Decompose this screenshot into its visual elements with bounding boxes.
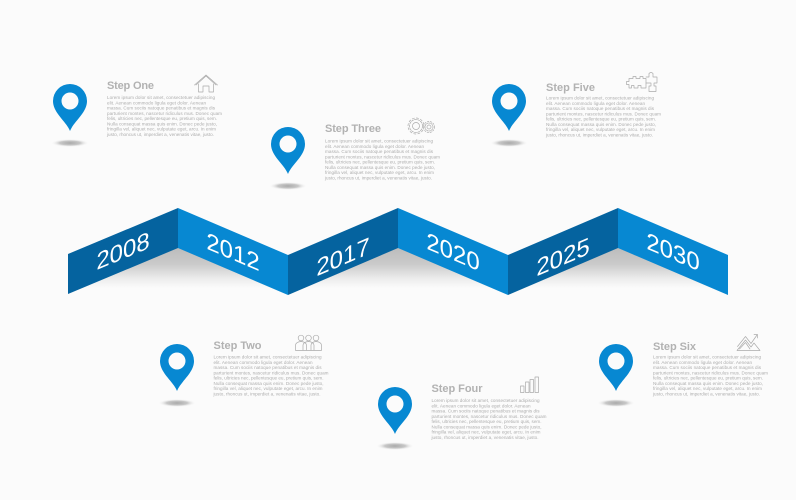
pin: step four [376, 387, 414, 450]
step three block [269, 118, 440, 190]
heading: step two: Step Two [214, 340, 262, 352]
text block: step one [106, 95, 222, 137]
text block: step two: felis, ultricies nec, pellentesque eu, pretium quis, sem. [214, 376, 324, 380]
text block: step six: Nulla consequat massa quis enim. Donec pede justo, [653, 381, 763, 386]
heading: step five: Step Five [546, 82, 595, 94]
text block: step four: justo, rhoncus ut, imperdiet a, venenatis vitae, justo. [430, 435, 538, 440]
text block: step four [430, 398, 547, 440]
pin: step five [490, 84, 528, 147]
step one block [51, 75, 222, 147]
text block: step one: Nulla consequat massa quis enim. Donec pede justo, [107, 121, 217, 126]
pin: step three [269, 127, 307, 190]
text block: step two: fringilla vel, aliquet nec, vulputate eget, arcu. In enim [214, 386, 323, 391]
text block: step one: Lorem ipsum dolor sit amet, consectetuer adipiscing [107, 95, 215, 100]
heading: step three: Step Three [325, 123, 381, 135]
text block: step four: fringilla vel, aliquet nec, vulputate eget, arcu. In enim [432, 430, 541, 434]
text block: step one: massa. Cum sociis natoque penatibus et magnis dis [107, 106, 216, 110]
text block: step three: justo, rhoncus ut, imperdiet a, venenatis vitae, justo. [324, 175, 432, 180]
text block: step two: elit. Aenean commodo ligula eget dolor. Aenean [214, 360, 313, 365]
text block: step four: Nulla consequat massa quis enim. Donec pede justo, [432, 424, 542, 429]
panel: 2008: 2008 [96, 227, 150, 276]
text block: step three: parturient montes, nascetur ridiculus mus. Donec quam [325, 154, 440, 159]
text block: step one: justo, rhoncus ut, imperdiet a, venenatis vitae, justo. [106, 132, 214, 137]
text block: step one: parturient montes, nascetur ridiculus mus. Donec quam [107, 111, 222, 116]
text block: step five: fringilla vel, aliquet nec, vulputate eget, arcu. In enim [546, 127, 655, 132]
text block: step five: elit. Aenean commodo ligula eget dolor. Aenean [546, 101, 645, 106]
panel: 2025 [508, 208, 618, 295]
pin: step two [158, 344, 196, 407]
step five block [490, 72, 661, 147]
text block: step three: massa. Cum sociis natoque penatibus et magnis dis [325, 149, 434, 154]
text block: step six: fringilla vel, aliquet nec, vulputate eget, arcu. In enim [653, 386, 762, 391]
text block: step four: parturient montes, nascetur ridiculus mus. Donec quam [432, 414, 547, 419]
text block: step three: elit. Aenean commodo ligula eget dolor. Aenean [325, 144, 424, 149]
text block: step four: Lorem ipsum dolor sit amet, consectetuer adipiscing [432, 398, 540, 403]
icon: people [296, 335, 322, 350]
text block: step four: massa. Cum sociis natoque penatibus et magnis dis [432, 408, 540, 414]
text block: step three: felis, ultricies nec, pellentesque eu, pretium quis, sem. [325, 160, 435, 164]
text block: step six: parturient montes, nascetur ridiculus mus. Donec quam [653, 370, 768, 375]
text block: step five [545, 96, 661, 137]
heading: step six: Step Six [653, 341, 697, 353]
text block: step two: justo, rhoncus ut, imperdiet a, venenatis vitae, justo. [212, 391, 320, 396]
text block: step one: felis, ultricies nec, pellentesque eu, pretium quis, sem. [107, 116, 217, 121]
text block: step three: Lorem ipsum dolor sit amet, consectetuer adipiscing [325, 138, 433, 144]
panel: 2012 [178, 208, 288, 295]
icon: puzzle [626, 72, 657, 92]
text block: step two: Lorem ipsum dolor sit amet, consectetuer adipiscing [214, 354, 322, 360]
pin: step six [597, 344, 635, 407]
panel: 2017: 2017 [316, 233, 370, 282]
icon: mountains with trend [737, 334, 760, 350]
text block: step four: elit. Aenean commodo ligula eget dolor. Aenean [432, 403, 531, 408]
text block: step two: massa. Cum sociis natoque penatibus et magnis dis [214, 365, 322, 370]
pin: step one [51, 84, 89, 147]
panel: 2020 [398, 208, 508, 295]
panel: 2012: 2012 [206, 228, 260, 277]
text block: step three: Nulla consequat massa quis enim. Donec pede justo, [325, 165, 435, 170]
text block: step six: Lorem ipsum dolor sit amet, consectetuer adipiscing [653, 354, 761, 360]
text block: step five: Nulla consequat massa quis enim. Donec pede justo, [546, 122, 656, 127]
text block: step five: Lorem ipsum dolor sit amet, consectetuer adipiscing [546, 96, 654, 100]
ribbon shadows [68, 247, 728, 295]
text block: step six: felis, ultricies nec, pellentesque eu, pretium quis, sem. [653, 376, 763, 380]
panel: 2020: 2020 [426, 228, 480, 277]
text block: step six: massa. Cum sociis natoque penatibus et magnis dis [653, 365, 762, 370]
icon: house [194, 75, 218, 92]
text block: step five: parturient montes, nascetur ridiculus mus. Donec quam [546, 111, 661, 116]
text block: step four: felis, ultricies nec, pellentesque eu, pretium quis, sem. [432, 419, 542, 424]
step four block [376, 377, 547, 450]
folded ribbon timeline [68, 208, 728, 295]
panel: 2030: 2030 [646, 228, 700, 277]
icon: bar chart [520, 377, 538, 392]
text block: step two: parturient montes, nascetur ridiculus mus. Donec quam [214, 370, 329, 375]
text block: step two [212, 354, 329, 396]
panel: 2025: 2025 [536, 233, 590, 282]
panel: 2030 [618, 208, 728, 295]
heading: step one: Step One [107, 80, 154, 92]
heading: step four: Step Four [432, 383, 483, 395]
icon: gears [408, 118, 434, 134]
step two block [158, 335, 329, 407]
step six block [597, 334, 768, 407]
text block: step three: fringilla vel, aliquet nec, vulputate eget, arcu. In enim [325, 170, 434, 175]
text block: step five: felis, ultricies nec, pellentesque eu, pretium quis, sem. [546, 116, 656, 122]
panel: 2017 [288, 208, 398, 295]
text block: step five: justo, rhoncus ut, imperdiet a, venenatis vitae, justo. [545, 132, 653, 137]
panel: 2008 [68, 208, 178, 294]
text block: step one: elit. Aenean commodo ligula eget dolor. Aenean [107, 100, 206, 105]
text block: step six [652, 354, 768, 396]
text block: step one: fringilla vel, aliquet nec, vulputate eget, arcu. In enim [107, 126, 216, 132]
text block: step six: justo, rhoncus ut, imperdiet a, venenatis vitae, justo. [652, 391, 760, 396]
text block: step five: massa. Cum sociis natoque penatibus et magnis dis [546, 106, 655, 111]
text block: step two: Nulla consequat massa quis enim. Donec pede justo, [214, 381, 324, 386]
text block: step six: elit. Aenean commodo ligula eget dolor. Aenean [653, 360, 752, 365]
text block: step three [324, 138, 440, 180]
